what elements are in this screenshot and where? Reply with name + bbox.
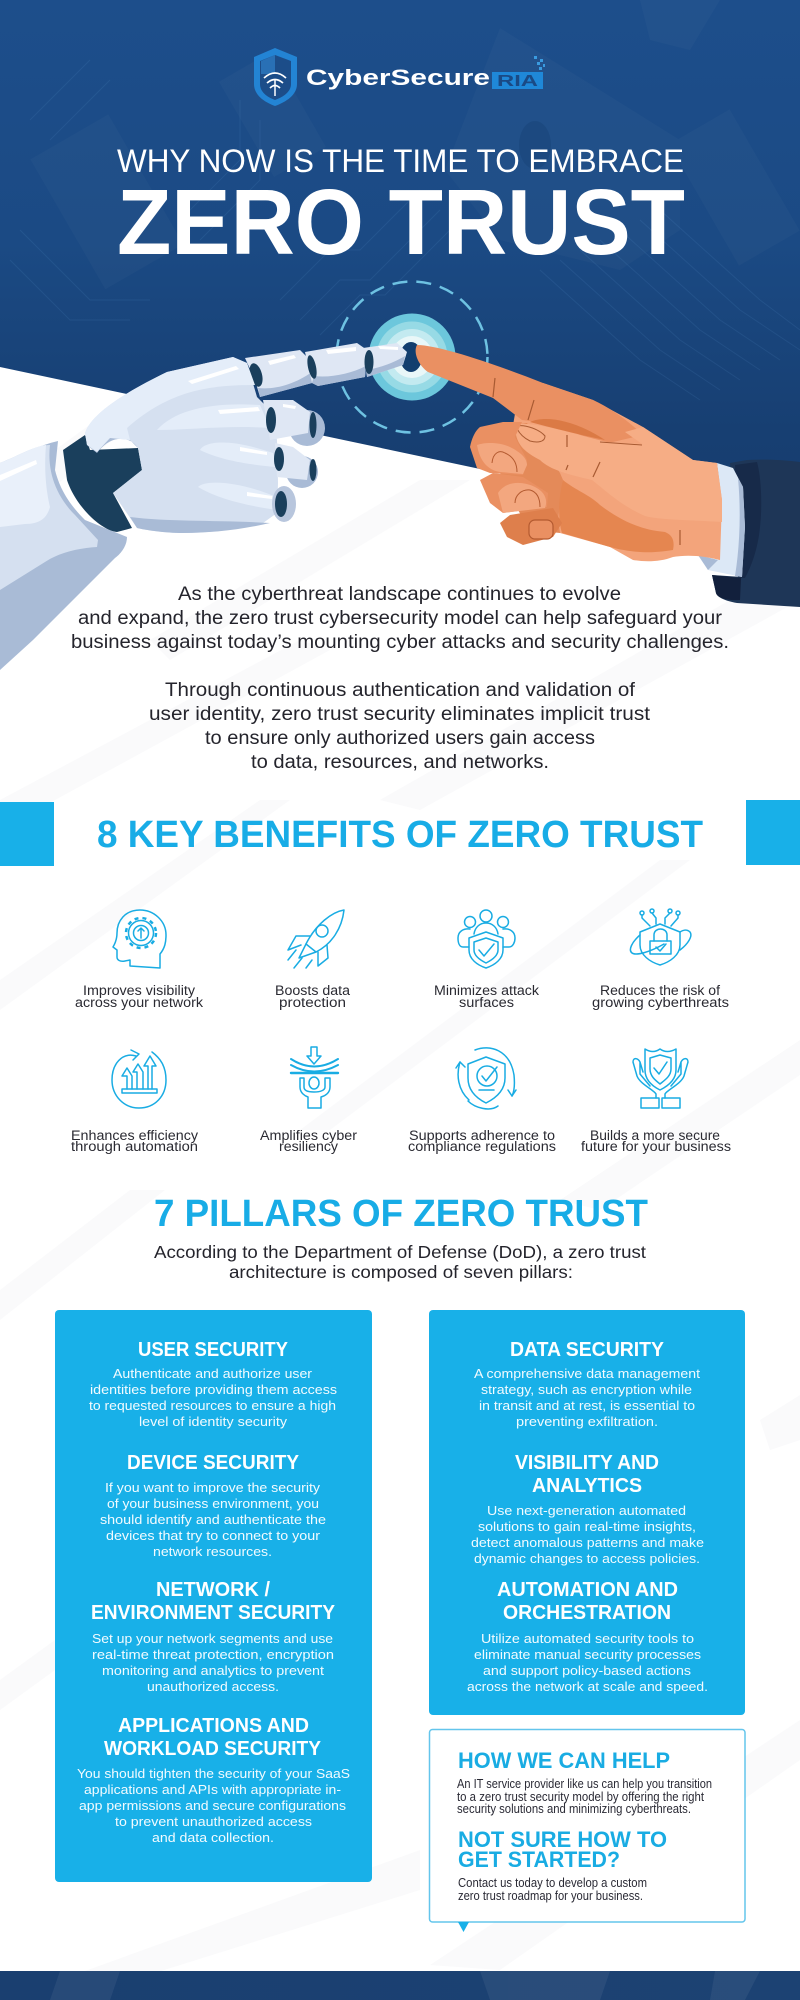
help text [457, 1777, 712, 1816]
pillar: applications and workload security: APPLICATIONS AND [118, 1715, 309, 1737]
pillar: data security: A comprehensive data management [474, 1366, 700, 1381]
pillar: applications and workload security: and data collection. [152, 1830, 274, 1845]
pillar: automation and orchestration: Utilize automated security tools to [481, 1631, 694, 1646]
section heading: 7 pillars [154, 1193, 648, 1282]
pillar: automation and orchestration: across the network at scale and speed. [467, 1679, 708, 1694]
intro text: to data, resources, and networks. [251, 752, 549, 773]
robot curled fingers [263, 400, 325, 522]
icon: rocket [288, 910, 344, 968]
pillar: applications and workload security: You should tighten the security of your SaaS [77, 1766, 350, 1781]
section heading: 8 key benefits [0, 800, 800, 866]
intro text: business against today’s mounting cyber attacks and security challenges. [71, 632, 729, 653]
label: growing cyberthreats [592, 995, 729, 1010]
label: Supports adherence to [409, 1128, 555, 1143]
pillar: applications and workload security [77, 1715, 350, 1845]
label: Minimizes attack [434, 983, 539, 998]
intro text: As the cyberthreat landscape continues to evolve [178, 584, 621, 605]
pillar: network / environment security: Set up your network segments and use [92, 1631, 333, 1646]
help heading: HOW WE CAN HELP [458, 1748, 670, 1773]
logo wordmark: CyberSecure [306, 65, 490, 90]
logo RIA badge: RIA [497, 73, 539, 90]
label [581, 1128, 731, 1154]
icon: hands holding shield [633, 1049, 688, 1108]
icon: people and shield [458, 910, 515, 968]
section heading: 7 pillars: architecture is composed of seven pillars: [229, 1262, 573, 1282]
pillar: user security [89, 1339, 338, 1429]
pillar: data security [474, 1339, 700, 1429]
benefit: compliance [408, 1048, 556, 1154]
intro text [71, 584, 729, 773]
section heading: 8 key benefits: 8 KEY BENEFITS OF ZERO TRUST [97, 814, 703, 856]
pillar: automation and orchestration: and support policy-based actions [483, 1663, 692, 1678]
title: WHY NOW IS THE TIME TO EMBRACE [117, 143, 684, 179]
pillar: applications and workload security: WORKLOAD SECURITY [104, 1738, 322, 1760]
pillar: network / environment security [91, 1579, 336, 1694]
robot forearm [0, 441, 127, 670]
pillar: visibility and analytics: dynamic changes to access policies. [474, 1551, 700, 1566]
hero background panel [0, 0, 800, 537]
help text: to a zero trust security model by offering the right [457, 1790, 704, 1804]
pillar: device security: DEVICE SECURITY [127, 1452, 300, 1474]
get started text: Contact us today to develop a custom [458, 1876, 647, 1890]
label: Improves visibility [83, 983, 195, 998]
label: through automation [71, 1139, 198, 1154]
pillar: applications and workload security: to prevent unauthorized access [115, 1814, 313, 1829]
pillar: visibility and analytics: ANALYTICS [532, 1475, 642, 1497]
callout: how we can help [430, 1730, 745, 1932]
pillar: applications and workload security: applications and APIs with appropriate in- [84, 1782, 341, 1797]
benefit: attack surfaces [434, 910, 539, 1010]
label [592, 983, 729, 1010]
pillar: device security [100, 1452, 326, 1559]
pillar: data security: DATA SECURITY [510, 1339, 665, 1361]
section heading: 7 pillars: According to the Department of Defense (DoD), a zero trust [154, 1242, 646, 1262]
pillar: automation and orchestration: eliminate manual security processes [474, 1647, 702, 1662]
label: resiliency [279, 1139, 338, 1154]
label: Boosts data [275, 983, 351, 998]
index finger [416, 345, 643, 445]
thumb and light back of hand [515, 424, 722, 545]
label: Reduces the risk of [600, 983, 720, 998]
pillar: network / environment security: real-time threat protection, encryption [92, 1647, 334, 1662]
human hand [416, 345, 800, 607]
touch target rings [336, 282, 488, 432]
pillar: visibility and analytics: solutions to gain real-time insights, [478, 1519, 696, 1534]
curled fingers [470, 422, 562, 545]
label: protection [279, 995, 346, 1010]
pillar: user security: Authenticate and authorize user [113, 1366, 313, 1381]
label: across your network [75, 995, 203, 1010]
intro text: user identity, zero trust security eliminates implicit trust [149, 704, 651, 725]
intro text: and expand, the zero trust cybersecurity model can help safeguard your [78, 608, 723, 629]
suit sleeve [712, 460, 800, 607]
help text: security solutions and minimizing cyberthreats. [457, 1802, 691, 1816]
icon: head with gear [113, 910, 166, 968]
benefit: secure future [581, 1049, 731, 1154]
benefit: automation [71, 1050, 198, 1154]
benefits grid [71, 909, 731, 1154]
benefit: visibility [75, 910, 203, 1010]
benefit: cyberthreats [592, 909, 729, 1010]
title: ZERO TRUST [117, 170, 685, 274]
pillar: data security: in transit and at rest, is essential to [479, 1398, 695, 1413]
pillar: automation and orchestration: AUTOMATION AND [497, 1579, 678, 1601]
get started heading: GET STARTED? [458, 1847, 620, 1872]
label: compliance regulations [408, 1139, 556, 1154]
pillar: device security: If you want to improve the security [105, 1480, 321, 1495]
label [275, 983, 351, 1010]
logo [254, 48, 545, 106]
icon: logo shield [254, 48, 297, 106]
help text: An IT service provider like us can help you transition [457, 1777, 712, 1791]
palm shade [500, 423, 674, 552]
pillar: automation and orchestration [467, 1579, 708, 1694]
label: future for your business [581, 1139, 731, 1154]
label: Enhances efficiency [71, 1128, 198, 1143]
robot palm [85, 357, 278, 533]
icon: growth arrows in cycle [112, 1050, 166, 1108]
pillar: device security: of your business environment, you [107, 1496, 319, 1511]
icon: person holding pressure [291, 1047, 338, 1108]
get started text: zero trust roadmap for your business. [458, 1889, 643, 1903]
get started heading [458, 1827, 667, 1872]
intro text: to ensure only authorized users gain access [205, 728, 595, 749]
label [71, 1128, 198, 1154]
pillar: network / environment security: monitoring and analytics to prevent [102, 1663, 324, 1678]
pillar: visibility and analytics [471, 1452, 704, 1566]
pillar: device security: network resources. [153, 1544, 272, 1559]
pillar: user security: to requested resources to ensure a high [89, 1398, 336, 1413]
pillar: visibility and analytics: detect anomalous patterns and make [471, 1535, 704, 1550]
label: Amplifies cyber [260, 1128, 358, 1143]
icon: circuit shield with lock [630, 909, 691, 965]
icon: shield with check in arrows [456, 1048, 516, 1109]
intro text: Through continuous authentication and validation of [165, 680, 636, 701]
get started heading: NOT SURE HOW TO [458, 1827, 667, 1852]
robot index finger [245, 343, 407, 397]
pillar: data security: strategy, such as encryption while [481, 1382, 692, 1397]
robot wrist [63, 435, 142, 532]
pillar: data security: preventing exfiltration. [516, 1414, 658, 1429]
pillar: visibility and analytics: Use next-generation automated [487, 1503, 686, 1518]
pillar: network / environment security: unauthorized access. [147, 1679, 279, 1694]
logo RIA badge [492, 56, 545, 90]
benefit: resiliency [260, 1047, 358, 1154]
panel: right pillars [429, 1310, 745, 1715]
label [434, 983, 539, 1010]
label [408, 1128, 556, 1154]
label [75, 983, 203, 1010]
robot hand [0, 343, 407, 670]
pillar: user security: identities before providing them access [90, 1382, 338, 1397]
pillar: device security: should identify and authenticate the [100, 1512, 326, 1527]
pillar: automation and orchestration: ORCHESTRATION [503, 1602, 671, 1624]
label: Builds a more secure [590, 1128, 720, 1143]
pillar: user security: level of identity security [139, 1414, 288, 1429]
pillar: network / environment security: NETWORK / [156, 1579, 270, 1601]
panel: left pillars [55, 1310, 372, 1882]
back of hand [500, 383, 722, 561]
pillar: device security: devices that try to connect to your [106, 1528, 321, 1543]
pillar: network / environment security: ENVIRONMENT SECURITY [91, 1602, 336, 1624]
pillar: applications and workload security: app permissions and secure configurations [79, 1798, 347, 1813]
get started text [458, 1876, 647, 1903]
label [260, 1128, 358, 1154]
section heading: 7 pillars: 7 PILLARS OF ZERO TRUST [154, 1193, 648, 1235]
pillar: user security: USER SECURITY [138, 1339, 289, 1361]
benefit: data protection [275, 910, 351, 1010]
label: surfaces [459, 995, 514, 1010]
pillar: visibility and analytics: VISIBILITY AND [515, 1452, 659, 1474]
footer band [0, 1971, 800, 2000]
shirt cuff [698, 463, 745, 577]
